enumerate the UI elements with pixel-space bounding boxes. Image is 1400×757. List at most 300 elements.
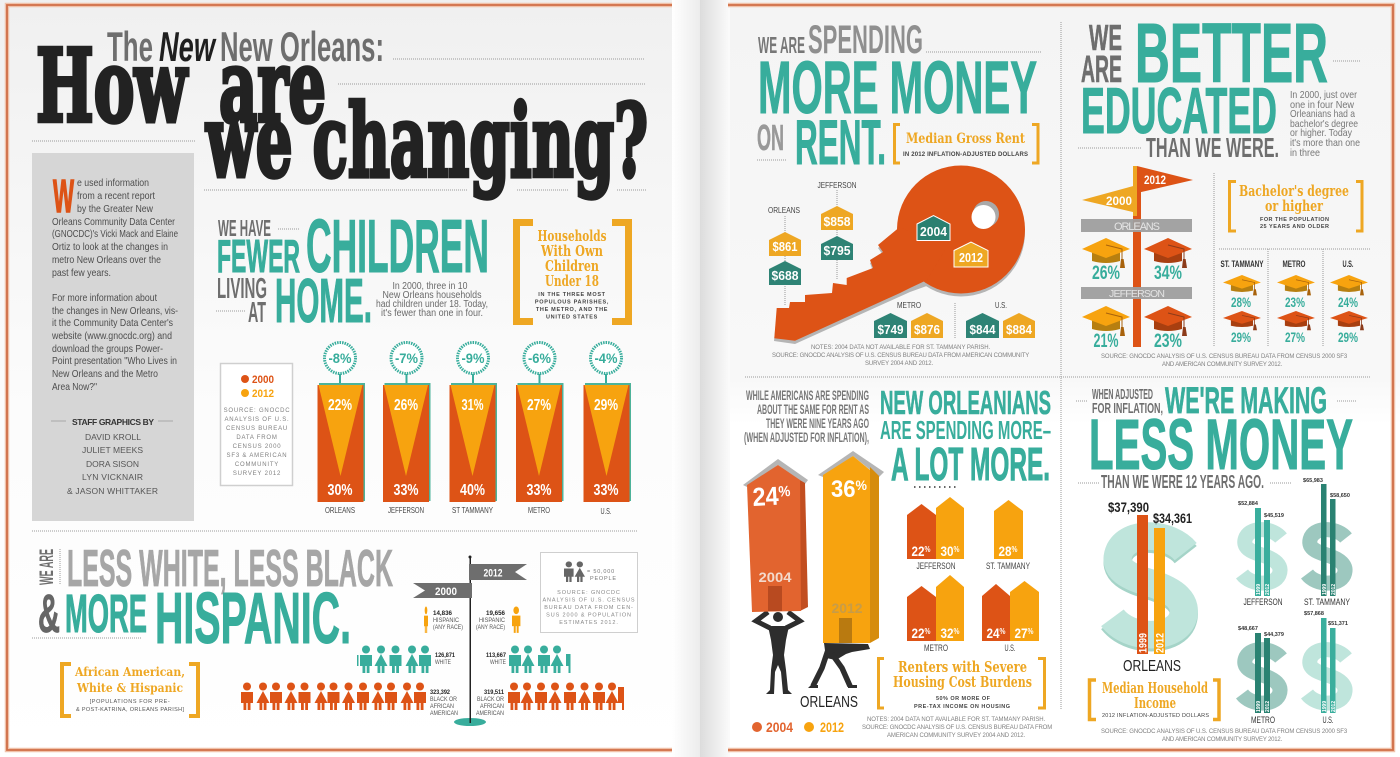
- row: Black: BLACK OR: [430, 696, 457, 703]
- intro text: (GNOCDC)'s Vicki Mack and Elaine: [52, 228, 178, 240]
- chart: St. Tammany income: [1303, 478, 1350, 608]
- houses: St. Tammany: ST. TAMMANY: [986, 561, 1030, 571]
- flag: 2012: [1137, 166, 1193, 193]
- callout: populations: [62, 664, 198, 716]
- houses: Jefferson: JEFFERSON: [916, 561, 956, 571]
- intro text: the changes in New Orleans, vis-: [52, 305, 178, 317]
- legend: population key: PEOPLE: [590, 576, 617, 582]
- chart: U.S. income: [1304, 611, 1348, 726]
- row: Hispanic: [424, 606, 520, 633]
- illustration: man carrying 2012 house: 2012: [832, 600, 863, 616]
- legend: children chart: CENSUS 2000: [233, 444, 281, 450]
- intro text: For more information about: [52, 292, 157, 304]
- houses: St. Tammany: %: [1012, 545, 1018, 554]
- legend: population key: SOURCE: GNOCDC: [557, 590, 621, 596]
- callout: populations: White & Hispanic: [76, 681, 183, 695]
- chart: Orleans income: [1108, 499, 1192, 675]
- chart: Jefferson income: 2012: [1265, 584, 1271, 595]
- source note: education: AND AMERICAN COMMUNITY SURVEY 2012.: [1162, 362, 1283, 368]
- caps: Metro: 27%: [1285, 329, 1305, 345]
- text: education paragraph: one in four New: [1290, 99, 1354, 111]
- houses: St. Tammany: 28: [998, 543, 1014, 559]
- bar: Metro: 33%: [526, 482, 552, 499]
- row: White: WHITE: [435, 659, 451, 666]
- row: White: 113,667: [486, 652, 506, 659]
- callout: renters: Renters with Severe: [898, 658, 1027, 676]
- caps: U.S.: 24%: [1338, 294, 1358, 310]
- bar: U.S.: U.S.: [600, 507, 612, 516]
- houses: Jefferson: %: [954, 545, 960, 554]
- callout: households: IN THE THREE MOST: [538, 292, 606, 298]
- text: education paragraph: it's more than one: [1290, 137, 1360, 149]
- houses: Metro: [907, 575, 964, 653]
- rent tags: U.S.: $844: [970, 322, 996, 337]
- infographic spread: THEY WERE NINE YEARS AGO: [766, 415, 869, 431]
- legend: children chart: ANALYSIS OF U.S.: [224, 417, 290, 423]
- bar: U.S.: 33%: [594, 482, 618, 499]
- illustration: man carrying 2004 house: 2004: [758, 569, 792, 585]
- houses: Jefferson: 30: [940, 543, 956, 559]
- flags and caps: Orleans and Jefferson: [1081, 166, 1193, 352]
- flag: 2000: 2000: [435, 586, 457, 598]
- caps: Jefferson: 21%: [1094, 331, 1119, 352]
- text: children paragraph: had children under 18. Today,: [376, 299, 488, 310]
- intro text: e used information: [77, 177, 149, 189]
- legend: population key: [540, 552, 638, 632]
- key tag: 2012: [954, 242, 988, 267]
- heading: better educated: ARE: [1081, 49, 1122, 91]
- text: children paragraph: In 2000, three in 10: [392, 281, 468, 292]
- legend: children chart: SURVEY 2012: [233, 471, 281, 477]
- row: Hispanic: 14,836: [433, 610, 452, 617]
- source note: renters: [862, 717, 1053, 739]
- heading: fewer children: AT: [248, 297, 266, 329]
- source note: renters: AMERICAN COMMUNITY SURVEY 2004 AND 2012.: [887, 733, 1026, 739]
- callout: median gross rent: [894, 124, 1038, 163]
- callout: median household income: Income: [1134, 695, 1176, 712]
- main title: New: [159, 23, 217, 70]
- intro text: Area Now?": [52, 381, 97, 393]
- bar: St Tammany: -9%: [462, 350, 485, 366]
- caps: St. Tammany: [1220, 259, 1264, 345]
- bar: St Tammany: 40%: [460, 482, 485, 499]
- text: while americans: WHILE AMERICANS ARE SPENDING: [746, 387, 869, 403]
- chart: Orleans income: $37,390: [1108, 499, 1149, 515]
- chart: Metro income: [1238, 626, 1284, 726]
- callout: bachelor's degree: FOR THE POPULATION: [1260, 217, 1329, 223]
- row: Black: AFRICAN: [480, 703, 504, 710]
- heading: less white, less black, more hispanic: &: [38, 584, 60, 644]
- heading: fewer children: HOME.: [275, 267, 372, 336]
- figure: strong man: [756, 612, 800, 694]
- legend: children chart: COMMUNITY: [235, 462, 279, 468]
- heading: spending more money on rent: ON: [757, 117, 784, 158]
- text: education paragraph: [1290, 89, 1360, 159]
- chart: St. Tammany income: $58,650: [1330, 493, 1350, 499]
- bar: Jefferson: 26%: [394, 397, 418, 414]
- legend: population key: = 50,000: [587, 569, 615, 575]
- rent tags: Jefferson: JEFFERSON: [818, 180, 856, 190]
- legend: children chart: 2012: [252, 388, 274, 400]
- rent tags: Orleans: $688: [772, 268, 798, 283]
- intro text: from a recent report: [77, 190, 155, 202]
- rent tags: Metro: $749: [878, 322, 904, 337]
- intro text: website (www.gnocdc.org) and: [51, 330, 172, 342]
- bar: Jefferson: [383, 342, 430, 515]
- text: education paragraph: In 2000, just over: [1290, 89, 1357, 101]
- source note: rent: [772, 345, 1030, 367]
- row: Hispanic: 19,656: [486, 610, 505, 617]
- panel: intro sidebar: W: [53, 170, 74, 222]
- row: Black: AMERICAN: [430, 710, 458, 717]
- text: education paragraph: in three: [1290, 147, 1320, 159]
- bar: Orleans: ORLEANS: [325, 506, 355, 515]
- callout: households: POPULOUS PARISHES,: [535, 300, 609, 306]
- heading: less white, less black, more hispanic: MORE: [65, 584, 147, 644]
- text: education paragraph: Orleanians had a: [1290, 108, 1355, 120]
- heading: new orleanians: A LOT MORE.: [891, 438, 1050, 490]
- staff credits: [51, 417, 173, 496]
- rent tags: Jefferson: $795: [824, 243, 850, 258]
- flag: 2000: [1082, 185, 1137, 213]
- legend: housing burden: 2004: [766, 719, 793, 735]
- source note: education: [1101, 354, 1348, 368]
- illustration: man carrying 2012 house: [808, 451, 884, 688]
- callout: households: With Own: [540, 243, 603, 260]
- bar: Jefferson: 33%: [394, 482, 418, 499]
- chart: Jefferson income: [1238, 501, 1284, 608]
- source note: renters: NOTES: 2004 DATA NOT AVAILABLE FOR ST. TAMMANY PARISH.: [867, 717, 1046, 723]
- bar: Orleans: -8%: [328, 350, 352, 366]
- text: children paragraph: New Orleans households: [382, 290, 482, 301]
- row: White: [357, 646, 570, 673]
- houses: U.S.: 24: [986, 625, 1002, 641]
- callout: populations: [POPULATIONS FOR PRE-: [90, 699, 170, 705]
- houses: St. Tammany: [986, 500, 1030, 571]
- flag: 2000: 2000: [1106, 194, 1132, 208]
- row: Black: BLACK OR: [477, 696, 504, 703]
- row: Hispanic: (ANY RACE): [433, 624, 463, 631]
- caps: St. Tammany: 29%: [1231, 329, 1251, 345]
- caps: Orleans: [1082, 238, 1192, 284]
- callout: bachelor's degree: or higher: [1265, 197, 1324, 215]
- icon: key: [774, 166, 1025, 344]
- heading: spending more money on rent: RENT.: [795, 108, 886, 178]
- staff credits: LYN VICKNAIR: [82, 472, 143, 482]
- chart: Jefferson income: 1999: [1256, 584, 1262, 595]
- chart: St. Tammany income: $65,983: [1303, 478, 1323, 484]
- chart: U.S. income: 1999: [1322, 701, 1328, 712]
- houses: U.S.: 27: [1014, 625, 1030, 641]
- callout: populations: African American,: [74, 665, 185, 679]
- callout: median gross rent: IN 2012 INFLATION-ADJUSTED DOLLARS: [903, 152, 1028, 158]
- text: while americans: [744, 387, 869, 445]
- heading: fewer children: [216, 204, 489, 336]
- intro text: Point presentation "Who Lives in: [52, 355, 177, 367]
- legend: population key: SUS 2000 & POPULATION: [546, 612, 632, 618]
- chart: St. Tammany income: 2012: [1331, 584, 1337, 595]
- heading: fewer children: FEWER: [217, 230, 300, 282]
- main title: we changing?: [205, 82, 648, 200]
- source note: income: AND AMERICAN COMMUNITY SURVEY 2012.: [1162, 737, 1283, 743]
- rent tags: Metro: [874, 300, 943, 338]
- legend: children chart: [220, 364, 292, 486]
- pictogram: population flagpole: [241, 556, 624, 726]
- legend: population key: ESTIMATES 2012.: [559, 620, 619, 626]
- caps: Metro: 23%: [1285, 294, 1305, 310]
- heading: fewer children: WE HAVE: [218, 215, 271, 241]
- intro text: it the Community Data Center's: [52, 317, 173, 329]
- rent tags: Metro: $876: [914, 322, 940, 337]
- rent tags: U.S.: $884: [1006, 322, 1033, 337]
- bar: St Tammany: [450, 342, 497, 515]
- chart: U.S. income: $51,371: [1328, 621, 1348, 627]
- legend: children chart: 2000: [252, 374, 274, 386]
- intro text: [51, 177, 178, 393]
- row: Hispanic: (ANY RACE): [476, 624, 505, 631]
- row: Hispanic: HISPANIC: [433, 617, 459, 624]
- bar: St Tammany: 31%: [462, 397, 484, 414]
- bar: Metro: -6%: [528, 350, 552, 366]
- intro text: past few years.: [52, 267, 111, 279]
- callout: median household income: Median Household: [1102, 680, 1208, 697]
- bar: Metro: 27%: [527, 397, 551, 414]
- heading: making less money: [1076, 380, 1357, 492]
- houses: Metro: %: [925, 627, 930, 636]
- source note: income: [1101, 729, 1348, 743]
- flag: 2000: [413, 583, 472, 598]
- callout: renters: [878, 658, 1044, 710]
- illustration: man carrying 2004 house: 24: [752, 480, 782, 512]
- callout: median household income: [1090, 680, 1219, 720]
- chart: Metro income: $44,379: [1264, 632, 1284, 638]
- caps: Metro: METRO: [1282, 259, 1306, 270]
- heading: new orleanians: NEW ORLEANIANS: [880, 384, 1051, 421]
- chart: Orleans income: 2012: [1154, 633, 1166, 653]
- callout: households: Children: [545, 258, 599, 275]
- source note: education: SOURCE: GNOCDC ANALYSIS OF U.S. CENSUS BUREAU DATA FROM CENSUS 2000 SF3: [1101, 354, 1348, 360]
- source note: renters: SOURCE: GNOCDC ANALYSIS OF U.S. CENSUS BUREAU DATA FROM: [862, 725, 1053, 731]
- houses: U.S.: %: [1028, 627, 1034, 636]
- band: Orleans: ORLEANS: [1114, 221, 1160, 233]
- legend: children chart: SOURCE: GNOCDC: [224, 408, 290, 414]
- caps: Jefferson: 23%: [1154, 331, 1182, 352]
- heading: spending more money on rent: [757, 18, 1042, 178]
- legend: children chart: SF3 & AMERICAN: [227, 453, 287, 459]
- caps: U.S.: U.S.: [1342, 259, 1354, 270]
- band: Jefferson: JEFFERSON: [1109, 288, 1165, 300]
- bar: U.S.: 29%: [594, 397, 618, 414]
- illustration: man carrying 2012 house: %: [856, 477, 868, 493]
- heading: better educated: [1078, 6, 1360, 163]
- staff credits: & JASON WHITTAKER: [67, 486, 158, 496]
- callout: households: THE METRO, AND THE: [536, 307, 608, 313]
- intro text: Orleans Community Data Center: [52, 216, 175, 228]
- flag: 2012: [469, 564, 527, 580]
- heading: new orleanians: [880, 384, 1051, 490]
- chart: U.S. income: $57,868: [1304, 611, 1324, 617]
- illustration: man carrying 2004 house: %: [778, 483, 791, 501]
- heading: better educated: THAN WE WERE.: [1146, 132, 1279, 163]
- text: children paragraph: [376, 281, 488, 319]
- bar: Metro: [516, 342, 564, 515]
- heading: making less money: THAN WE WERE 12 YEARS AGO.: [1101, 472, 1264, 492]
- row: Black: AMERICAN: [476, 710, 504, 717]
- key tag: 2004: 2004: [920, 224, 948, 239]
- bar: Orleans: [318, 342, 365, 515]
- heading: new orleanians: ARE SPENDING MORE–: [880, 415, 1051, 445]
- key tag: 2004: [917, 216, 950, 240]
- illustration: man carrying 2004 house: [743, 459, 808, 694]
- caps: Jefferson: [1082, 306, 1192, 352]
- panel: intro sidebar: [32, 153, 194, 521]
- row: Black: [241, 682, 624, 717]
- rent tags: Orleans: $861: [772, 239, 798, 254]
- chart: Orleans income: 1999: [1138, 633, 1150, 653]
- houses: Metro: METRO: [924, 643, 948, 653]
- callout: households: Under 18: [545, 273, 599, 290]
- source note: income: SOURCE: GNOCDC ANALYSIS OF U.S. CENSUS BUREAU DATA FROM CENSUS 2000 SF3: [1101, 729, 1348, 735]
- chart: St. Tammany income: ST. TAMMANY: [1304, 597, 1350, 608]
- bar: Orleans: 30%: [328, 482, 352, 499]
- intro text: New Orleans and the Metro: [52, 368, 158, 380]
- heading: spending more money on rent: SPENDING: [808, 18, 923, 62]
- houses: U.S.: %: [1000, 627, 1006, 636]
- callout: bachelor's degree: 25 YEARS AND OLDER: [1260, 224, 1329, 230]
- bar: Jefferson: JEFFERSON: [388, 506, 424, 515]
- callout: median gross rent: Median Gross Rent: [906, 131, 1025, 147]
- houses: Metro: %: [954, 627, 960, 636]
- callout: households: Households: [538, 228, 606, 245]
- staff credits: DORA SISON: [86, 459, 139, 469]
- heading: spending more money on rent: WE ARE: [758, 32, 805, 58]
- flag: 2012: 2012: [1144, 173, 1166, 187]
- heading: making less money: FOR INFLATION,: [1092, 401, 1163, 417]
- heading: fewer children: LIVING: [217, 273, 267, 305]
- rent tags: U.S.: U.S.: [995, 300, 1007, 310]
- caps: U.S.: 29%: [1338, 329, 1358, 345]
- legend: housing burden: [752, 719, 844, 735]
- bar: Orleans: 22%: [328, 397, 352, 414]
- chart: Metro income: 1999: [1256, 701, 1262, 712]
- main title: The: [107, 23, 153, 70]
- intro text: metro New Orleans over the: [52, 254, 161, 266]
- houses: Jefferson: [907, 497, 964, 571]
- infographic spread: LESS WHITE, LESS BLACK: [67, 540, 393, 598]
- bar: U.S.: [584, 342, 631, 516]
- chart: Metro income: METRO: [1251, 715, 1275, 726]
- caps: St. Tammany: ST. TAMMANY: [1220, 259, 1264, 270]
- rent tags: U.S.: [955, 300, 1035, 338]
- rent tags: Jefferson: $858: [824, 214, 850, 229]
- callout: populations: & POST-KATRINA, ORLEANS PARISH]: [76, 707, 184, 713]
- staff credits: STAFF GRAPHICS BY: [72, 417, 154, 427]
- chart: Metro income: $48,667: [1238, 626, 1258, 632]
- legend: population key: ANALYSIS OF U.S. CENSUS: [542, 598, 636, 604]
- staff credits: JULIET MEEKS: [82, 445, 143, 455]
- band: Orleans: [1081, 219, 1192, 233]
- legend: population key: BUREAU DATA FROM CEN-: [544, 605, 634, 611]
- houses: Jefferson: 22: [912, 543, 927, 559]
- figure: bent man: [808, 643, 870, 688]
- row: Hispanic: HISPANIC: [479, 617, 505, 624]
- label: Orleans: ORLEANS: [800, 694, 858, 711]
- bar: Metro: METRO: [528, 506, 550, 515]
- infographic spread: ABOUT THE SAME FOR RENT AS: [757, 401, 869, 417]
- intro text: by the Greater New: [77, 203, 153, 215]
- chart: U.S. income: U.S.: [1322, 715, 1334, 726]
- heading: spending more money on rent: MORE MONEY: [758, 46, 1037, 129]
- callout: renters: Housing Cost Burdens: [893, 673, 1032, 691]
- bar chart: households with children: [318, 342, 631, 516]
- main title: are: [219, 27, 326, 145]
- houses: Metro: 22: [912, 625, 927, 641]
- chart: Jefferson income: $52,884: [1238, 501, 1259, 507]
- heading: less white, less black, more hispanic: HISPANIC.: [155, 579, 351, 659]
- bar: U.S.: -4%: [594, 350, 618, 366]
- text: while americans: (WHEN ADJUSTED FOR INFLATION),: [744, 429, 869, 445]
- rent tags: Orleans: ORLEANS: [768, 205, 800, 215]
- band: Jefferson: [1081, 287, 1192, 300]
- caps: Metro: [1277, 259, 1315, 345]
- source note: rent: SURVEY 2004 AND 2012.: [865, 361, 934, 367]
- flag: 2012: 2012: [484, 568, 502, 580]
- text: children paragraph: it's fewer than one in four.: [381, 308, 483, 319]
- row: White: WHITE: [490, 659, 506, 666]
- heading: less white, less black, more hispanic: WE ARE: [37, 549, 58, 585]
- chart: Metro income: 2012: [1265, 701, 1271, 712]
- legend: children chart: DATA FROM: [236, 435, 278, 441]
- callout: renters: PRE-TAX INCOME ON HOUSING: [914, 704, 1010, 710]
- source note: rent: SOURCE: GNOCDC ANALYSIS OF U.S. CENSUS BUREAU DATA FROM AMERICAN COMMUNITY: [772, 353, 1030, 359]
- callout: bachelor's degree: Bachelor's degree: [1239, 182, 1349, 200]
- chart: Jefferson income: $45,519: [1264, 513, 1284, 519]
- caps: St. Tammany: 28%: [1231, 294, 1251, 310]
- illustration: man carrying 2012 house: 36: [831, 476, 858, 503]
- caps: Orleans: 34%: [1154, 263, 1182, 284]
- main title: New Orleans:: [220, 23, 384, 70]
- houses: U.S.: [982, 581, 1039, 653]
- chart: Jefferson income: JEFFERSON: [1244, 597, 1283, 608]
- key tag: 2012: 2012: [959, 250, 983, 265]
- intro text: Ortiz to look at the changes in: [52, 241, 168, 253]
- heading: better educated: WE: [1089, 17, 1122, 58]
- caps: U.S.: [1330, 259, 1368, 345]
- row: Black: AFRICAN: [430, 703, 454, 710]
- main title: How: [36, 27, 189, 145]
- heading: making less money: WHEN ADJUSTED: [1092, 387, 1153, 403]
- staff credits: DAVID KROLL: [85, 432, 141, 442]
- legend: children chart: CENSUS BUREAU: [226, 426, 288, 432]
- chart: St. Tammany income: 1999: [1322, 584, 1328, 595]
- main title: [36, 23, 648, 200]
- source note: rent: NOTES: 2004 DATA NOT AVAILABLE FOR ST. TAMMANY PARISH.: [811, 345, 991, 351]
- houses: U.S.: U.S.: [1004, 643, 1016, 653]
- houses: Metro: 32: [940, 625, 956, 641]
- rent tags: Metro: METRO: [897, 300, 921, 310]
- callout: median household income: 2012 INFLATION-ADJUSTED DOLLARS: [1102, 713, 1209, 719]
- bar: Jefferson: -7%: [395, 350, 419, 366]
- bar: St Tammany: ST TAMMANY: [452, 506, 494, 515]
- row: Black: 319,511: [484, 689, 504, 696]
- rent tags: Jefferson: [818, 180, 856, 280]
- heading: less white, less black, more hispanic: [32, 540, 393, 659]
- row: Black: 323,392: [430, 689, 450, 696]
- chart: Orleans income: ORLEANS: [1123, 658, 1181, 675]
- houses: Jefferson: %: [925, 545, 930, 554]
- callout: bachelor's degree: [1230, 182, 1362, 231]
- legend: housing burden: 2012: [820, 719, 844, 735]
